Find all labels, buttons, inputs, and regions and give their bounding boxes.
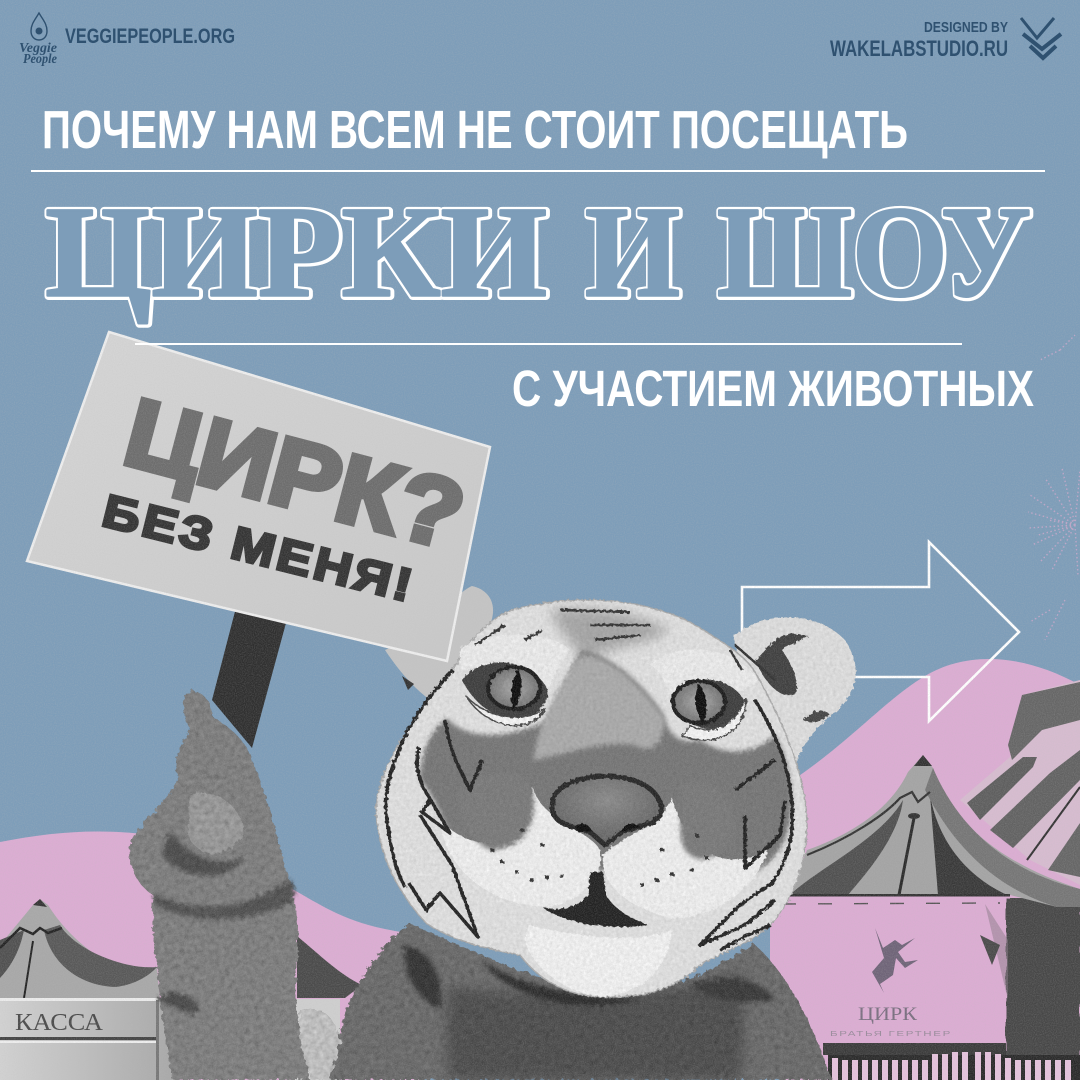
tiger ear: left xyxy=(385,586,493,700)
brow: left xyxy=(460,635,570,695)
nose bridge highlight xyxy=(533,655,664,760)
headline: circus and shows: ШОУ xyxy=(717,180,1031,324)
mouth xyxy=(543,872,648,927)
tiger head xyxy=(376,600,807,997)
pink brush shape: right xyxy=(780,659,1080,1080)
cashier booth xyxy=(0,998,340,1080)
eye: right xyxy=(672,680,746,740)
muzzle: left gray xyxy=(459,773,534,850)
protest sign xyxy=(27,332,490,661)
tiger arm and paw xyxy=(129,690,340,1080)
brow: right xyxy=(650,649,758,695)
tiger ear: right xyxy=(733,617,856,765)
logo: veggie people xyxy=(19,13,57,67)
logo text: veggiepeople.org: VEGGIEPEOPLE.ORG xyxy=(65,25,235,48)
circus name: ЦИРК xyxy=(858,1004,917,1025)
credit text: designed by: DESIGNED BY xyxy=(924,19,1008,36)
fence xyxy=(828,1052,1080,1080)
muzzle: left lobe xyxy=(440,787,601,907)
muzzle: right gray xyxy=(680,782,735,859)
big tent: front xyxy=(788,755,1080,907)
nostrils xyxy=(575,823,640,832)
forehead shading xyxy=(550,609,670,662)
circus booth: wall xyxy=(770,897,1080,1080)
booth sign: КАССА xyxy=(15,1010,104,1036)
headline: circus and shows: И xyxy=(586,181,681,325)
arrow xyxy=(742,542,1019,721)
tiger body xyxy=(330,923,832,1080)
whisker dots xyxy=(490,830,710,885)
head base xyxy=(376,600,807,997)
nose xyxy=(552,776,661,845)
sign text: small: БЕЗ МЕНЯ! xyxy=(98,484,421,612)
avocado icon xyxy=(31,13,47,40)
stripes: right xyxy=(700,700,792,950)
logo word two: People xyxy=(23,52,57,67)
eye: left xyxy=(462,662,548,726)
gray face band xyxy=(420,650,792,880)
headline: circus and shows: ЦИРКИ xyxy=(45,180,547,324)
forehead marks xyxy=(475,610,775,680)
headline: circus and shows xyxy=(45,180,1032,325)
chin xyxy=(525,925,672,997)
sign pole xyxy=(212,600,289,748)
circus logo figure xyxy=(872,928,918,993)
headline: circus and shows: ЦИРКИ xyxy=(46,181,548,325)
small tent: left xyxy=(0,899,362,1000)
fireworks xyxy=(1028,335,1080,640)
pink brush shape: left xyxy=(0,831,420,1080)
credit text: wakelab studio: WAKELABSTUDIO.RU xyxy=(830,36,1008,61)
logo word one: Veggie xyxy=(19,41,57,56)
stripes: left xyxy=(386,670,482,937)
circus subtitle: БРАТЬЯ ГЕРТНЕР xyxy=(830,1031,952,1038)
headline: circus and shows: И xyxy=(585,180,680,324)
big tent: rear xyxy=(960,680,1080,885)
sign text: large: ЦИРК? xyxy=(115,379,475,570)
icon: wakelab chevrons xyxy=(1021,18,1061,58)
headline: circus and shows: ШОУ xyxy=(718,181,1032,325)
muzzle: right lobe xyxy=(603,798,768,918)
